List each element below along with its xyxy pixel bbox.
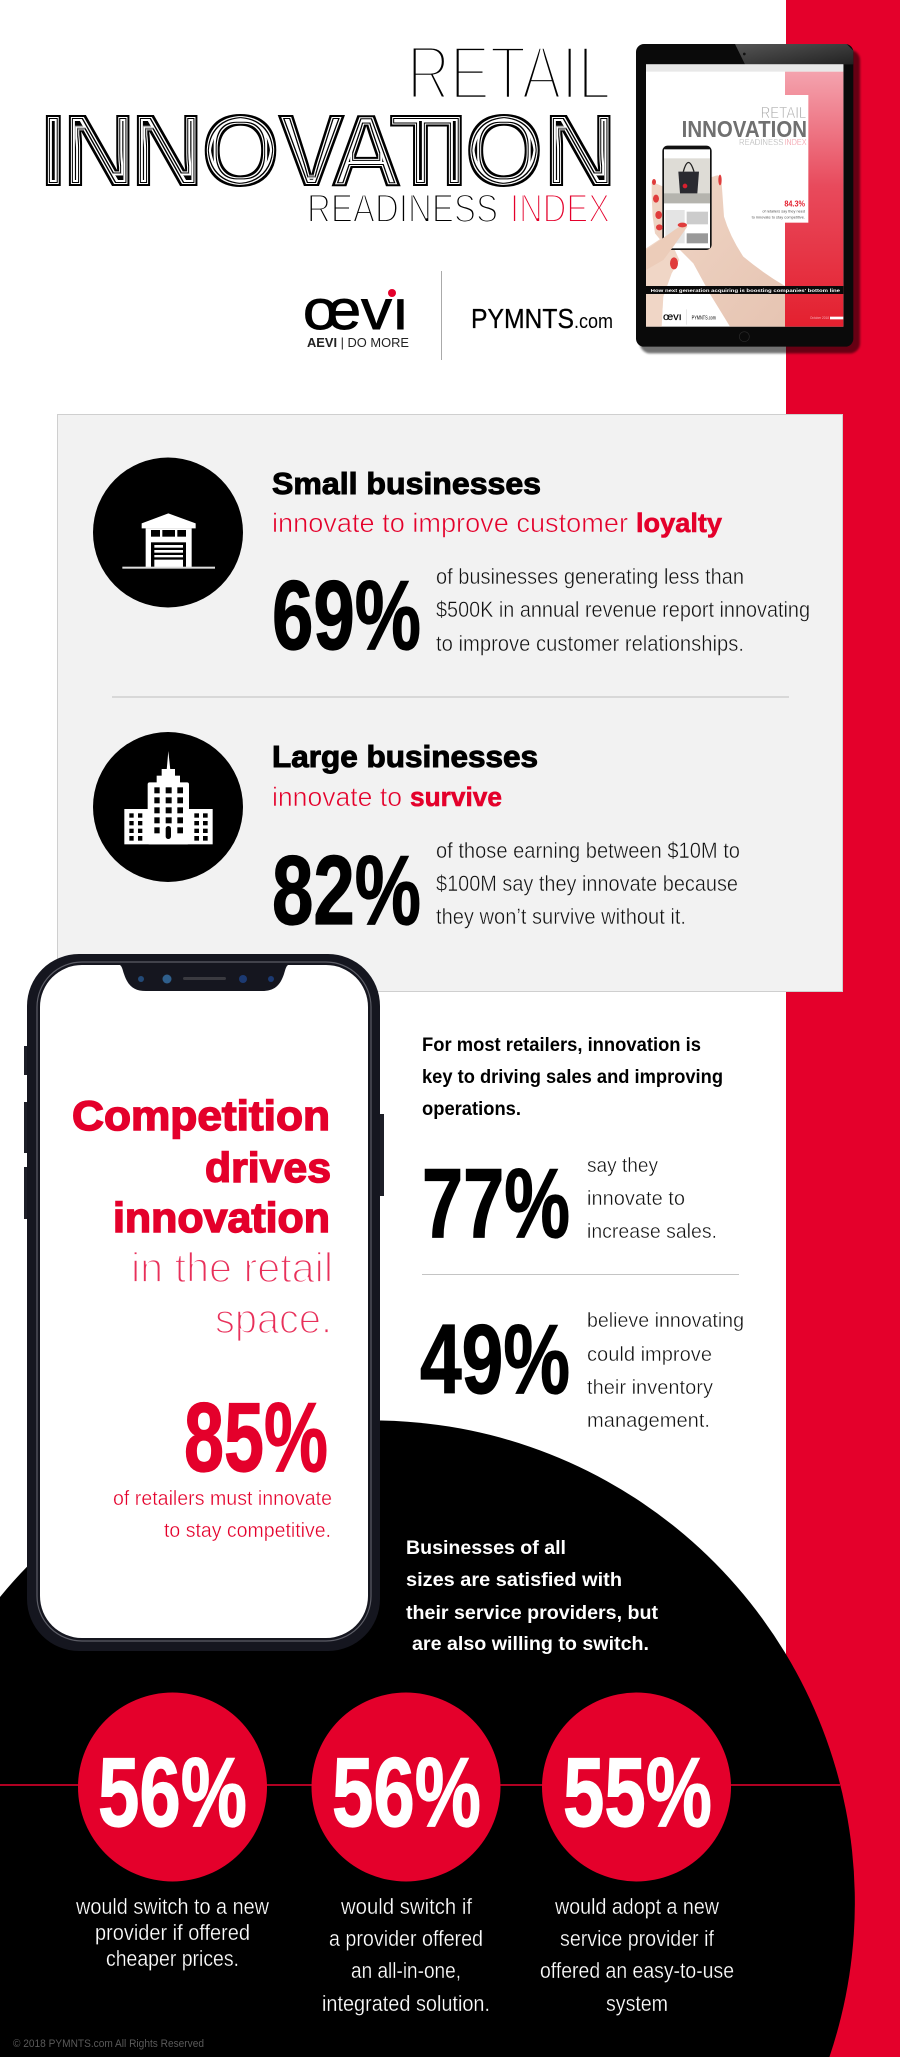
text: inventory: management. [587, 1410, 710, 1432]
subheading: survive: innovate to [272, 782, 402, 812]
phone body [27, 954, 380, 1651]
title block [39, 31, 617, 231]
caption: all-in-one: an all-in-one, [351, 1958, 461, 1983]
phone subheading: in the retail space: space. [215, 1295, 332, 1342]
text: retailers intro: For most retailers, innovation is [422, 1035, 701, 1056]
report phone [662, 146, 712, 250]
logo: AEVI: œvı [303, 278, 409, 341]
phone screen [40, 965, 368, 1638]
icon: office building [93, 732, 243, 882]
text: small business detail: $500K in annual revenue report innovating [436, 597, 810, 622]
text: increase sales: increase sales. [587, 1221, 717, 1243]
caption: cheaper prices: would switch to a new [75, 1894, 269, 1919]
stat circle: 56% all-in-one [312, 1692, 500, 2016]
report title box [681, 95, 808, 223]
caption: easy-to-use [540, 1894, 734, 2016]
text: increase sales [587, 1155, 717, 1243]
panel divider [112, 696, 789, 698]
text: inventory: could improve [587, 1344, 712, 1366]
connector line [0, 1784, 840, 1786]
tablet mockup of the report cover [636, 44, 860, 353]
caption: easy-to-use: service provider if [560, 1926, 715, 1951]
black dome background [0, 1420, 855, 2057]
report statistic: 84.3% [784, 199, 805, 209]
title: INNOVATION striped: INNOVATION [39, 93, 617, 208]
stat: 49%: 49% [420, 1304, 570, 1414]
tablet camera [743, 53, 746, 55]
caption: all-in-one: a provider offered [329, 1926, 483, 1951]
text: large business detail [436, 838, 740, 929]
panel: small and large businesses [58, 414, 842, 992]
stat circle: 55% easy-to-use [540, 1692, 734, 2016]
phone bezel highlight [37, 962, 371, 1641]
logo: PYMNTS.com: .com [574, 311, 613, 333]
stat: 82%: 82% [272, 835, 421, 945]
subheading: loyalty: loyalty [636, 508, 722, 538]
smartphone panel [24, 954, 384, 1651]
tablet screen [646, 64, 843, 327]
text: retailers must innovate: to stay competitive. [164, 1520, 331, 1542]
text: inventory [587, 1310, 744, 1432]
text: inventory: their inventory [587, 1377, 713, 1399]
stat: 77%: 77% [422, 1148, 570, 1258]
caption: easy-to-use: would adopt a new [554, 1894, 719, 1919]
text: satisfied but willing to switch: their service providers, but [406, 1603, 659, 1624]
report statistic: of retailers say they need [762, 209, 805, 214]
text: small business detail: to improve customer relationships. [436, 631, 744, 656]
title: RETAIL: RETAIL [407, 31, 611, 116]
report footer: PYMNTS.com [692, 316, 716, 322]
caption: cheaper prices [75, 1894, 269, 1971]
text: increase sales: innovate to [587, 1188, 685, 1210]
section divider [422, 1274, 739, 1275]
text: satisfied but willing to switch: Businesses of all [406, 1538, 566, 1559]
tablet status bar [646, 64, 843, 72]
phone notch [116, 964, 292, 991]
caption: all-in-one: would switch if [340, 1894, 473, 1919]
text: retailers intro: key to driving sales and improving [422, 1067, 723, 1088]
stat circle: 55% easy-to-use: 55% [563, 1737, 712, 1847]
logo divider [441, 271, 442, 360]
stat circle: 56% cheaper prices: 56% [98, 1737, 247, 1847]
text: satisfied but willing to switch: sizes are satisfied with [406, 1570, 622, 1591]
logo: AEVI: AEVI | DO MORE [307, 335, 409, 350]
report title text: READINESS [739, 138, 783, 147]
caption: cheaper prices: provider if offered [95, 1920, 250, 1945]
text: inventory: believe innovating [587, 1310, 744, 1332]
panel background [58, 414, 842, 992]
text: large business detail: they won’t survive without it. [436, 904, 686, 929]
subheading: survive [272, 782, 502, 812]
caption: easy-to-use: offered an easy-to-use [540, 1958, 734, 1983]
caption: all-in-one [322, 1894, 490, 2016]
report statistic [752, 199, 805, 220]
text: small business detail: of businesses generating less than [436, 564, 744, 589]
text: retailers intro [422, 1035, 723, 1120]
text: retailers must innovate: of retailers must innovate [113, 1488, 332, 1510]
background: red side bar [786, 0, 900, 2057]
text: large business detail: $100M say they innovate because [436, 871, 738, 896]
text: large business detail: of those earning between $10M to [436, 838, 740, 863]
text: retailers must innovate [113, 1488, 332, 1542]
report title text: INNOVATION [682, 116, 807, 142]
caption: all-in-one: integrated solution. [322, 1991, 490, 2016]
phone subheading: in the retail space [131, 1244, 333, 1342]
phone subheading: in the retail space: in the retail [131, 1244, 333, 1291]
report footer [663, 308, 843, 326]
phone heading: competition drives innovation: Competition [72, 1092, 330, 1139]
phone heading: competition drives innovation: innovation [113, 1194, 330, 1241]
text: increase sales: say they [587, 1155, 658, 1177]
stat circle: 56% cheaper prices [75, 1692, 269, 1971]
tablet body [636, 44, 853, 347]
stat: 69%: 69% [272, 560, 421, 670]
subheading: survive: survive [410, 782, 502, 812]
stat: 85%: 85% [184, 1382, 328, 1492]
logo: PYMNTS.com: PYMNTS [471, 303, 574, 334]
heading: large businesses: Large businesses [272, 739, 538, 774]
report nails [652, 175, 722, 269]
report title text [682, 105, 807, 147]
report title text: INDEX [784, 138, 807, 147]
text: small business detail [436, 564, 810, 656]
tablet home button [739, 332, 749, 342]
stat circle: 56% all-in-one: 56% [332, 1737, 481, 1847]
phone side buttons [24, 1046, 384, 1219]
report pointing finger [646, 223, 687, 270]
phone heading: competition drives innovation: drives [205, 1144, 331, 1191]
report footer: œvı [663, 312, 682, 323]
text: retailers intro: operations. [422, 1099, 521, 1120]
report red band [785, 72, 843, 327]
report tagline band: How next generation acquiring is boosting companies' bottom line [651, 288, 841, 293]
tablet glare [735, 44, 853, 64]
title: INDEX: INDEX [510, 187, 610, 231]
report statistic: to innovate to stay competitive. [752, 215, 805, 220]
text: satisfied but willing to switch [406, 1538, 659, 1655]
caption: cheaper prices: cheaper prices. [106, 1946, 239, 1971]
report hands [646, 175, 785, 327]
report tagline band [646, 286, 843, 294]
footer copyright: © 2018 PYMNTS.com All Rights Reserved [13, 2038, 204, 2050]
report footer: October 2018 [810, 316, 829, 320]
section: sales and inventory [420, 1035, 744, 1432]
phone heading: competition drives innovation [72, 1092, 331, 1241]
heading: small businesses: Small businesses [272, 466, 541, 501]
caption: easy-to-use: system [606, 1991, 668, 2016]
logos [303, 271, 613, 360]
title: READINESS: READINESS [307, 187, 498, 231]
subheading: loyalty: innovate to improve customer [272, 508, 628, 538]
tablet shadow [640, 50, 860, 353]
text: satisfied but willing to switch: are also willing to switch. [412, 1634, 649, 1655]
report title text: RETAIL [761, 105, 807, 122]
icon: warehouse [93, 458, 243, 608]
